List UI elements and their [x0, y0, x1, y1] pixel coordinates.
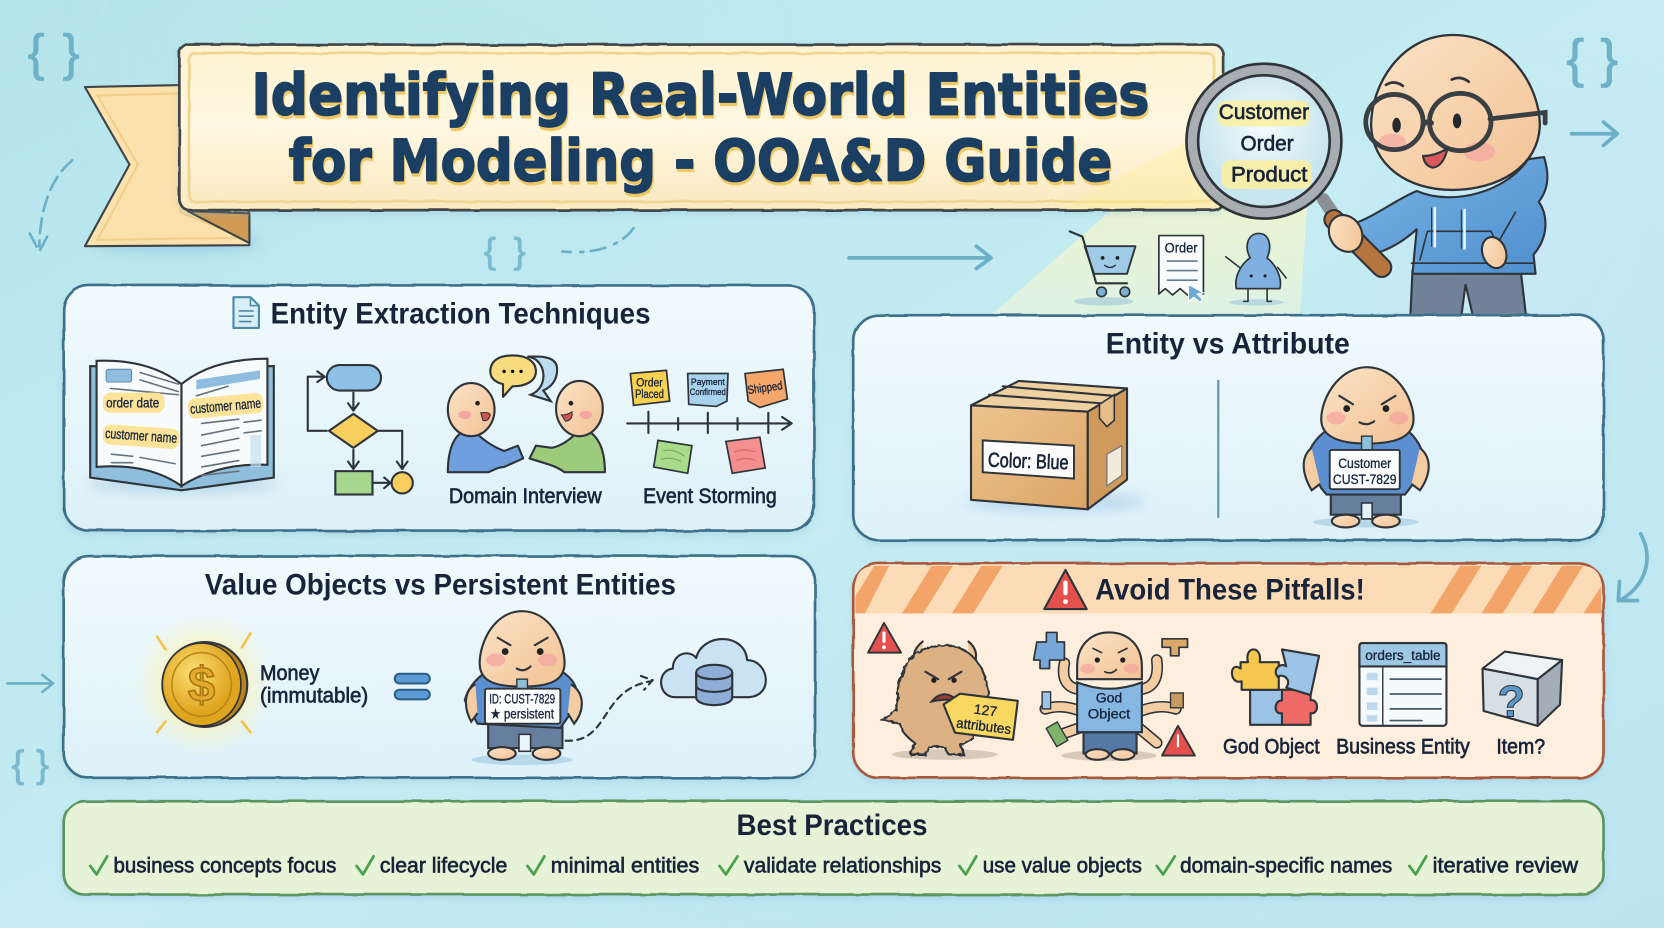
equals sign: [395, 674, 430, 699]
person left: [448, 429, 523, 472]
event storming illustration: Placed: [635, 388, 664, 401]
dashed arrow to database: [566, 676, 653, 741]
panel frame: [64, 801, 1604, 895]
decorative brace lower left: { }: [12, 743, 49, 786]
magnifier lens: [1186, 64, 1341, 219]
label: god object: God Object: [1223, 735, 1320, 758]
coin label: Money: [260, 662, 320, 685]
icon: warning triangle: [1044, 570, 1087, 609]
flowchart: [308, 365, 413, 495]
box label: [983, 440, 1074, 479]
character with customer badge: Customer: [1338, 456, 1392, 471]
magnifier words: Customer: [1219, 101, 1309, 124]
timeline: [627, 412, 792, 433]
event storming illustration: Payment: [691, 377, 725, 388]
caption: Domain Interview: [449, 485, 602, 508]
event storming illustration: Shipped: [747, 379, 783, 397]
decorative brace top right: { }: [1566, 29, 1618, 88]
heading: Avoid These Pitfalls!: [1095, 574, 1365, 607]
mascot gripping hand: [1322, 209, 1369, 258]
capsule head and shirt: [1077, 632, 1142, 679]
panel: entity vs attribute: [853, 315, 1604, 540]
highlighted words: [103, 393, 164, 413]
warning triangle: [1162, 726, 1195, 756]
arms: [1045, 660, 1176, 743]
panel frame: [64, 285, 814, 531]
panel frame: [64, 556, 815, 778]
attributes tag: 127: [973, 702, 998, 719]
book with highlighted nouns: order date: [106, 395, 159, 410]
speech bubbles: [527, 357, 557, 401]
icon: order receipt: Order: [1165, 241, 1198, 256]
icon: order receipt: [1159, 236, 1203, 302]
checklist: business concepts focus: [114, 854, 336, 877]
heading: Entity vs Attribute: [1106, 327, 1350, 360]
title text: for Modeling - OOA&D Guide: [289, 127, 1112, 194]
mascot glasses: [1366, 93, 1545, 151]
icon: orders table: orders_table: [1365, 648, 1441, 663]
icon: blue person: [1226, 233, 1286, 306]
checklist: iterative review: [1433, 854, 1579, 877]
title text: [252, 62, 1149, 194]
character with customer badge: CUST-7829: [1333, 472, 1397, 487]
magnifier neck and handle: [1323, 200, 1335, 216]
label: business entity: Business Entity: [1336, 735, 1470, 758]
magnifying glass: Order: [1241, 133, 1294, 156]
icon: shopping cart: [1070, 231, 1136, 306]
arrow: left edge: [7, 675, 53, 692]
title banner: [85, 45, 1224, 253]
mascot with magnifying glass: [1186, 35, 1547, 316]
attributes tag: [940, 692, 1018, 740]
many-armed god object character: Object: [1088, 706, 1130, 721]
decorative brace under banner: { }: [484, 230, 526, 271]
heading: Best Practices: [736, 809, 928, 842]
coin label: (immutable): [260, 685, 368, 707]
many-armed god object character: [1034, 632, 1195, 761]
light beam: [992, 138, 1307, 314]
icon: mystery question box: ?: [1498, 677, 1525, 726]
icon: mystery question box: [1483, 652, 1562, 726]
decorative brace top left: { }: [28, 24, 80, 81]
checklist: domain-specific names: [1180, 854, 1392, 877]
panel: best practices: [64, 801, 1604, 895]
ID badge: [485, 689, 560, 724]
mascot hand on hip: [1478, 234, 1511, 272]
checklist: [90, 854, 1579, 877]
banner body: [179, 45, 1224, 210]
shirt label: God: [1096, 690, 1122, 705]
character with customer badge: [1304, 367, 1429, 527]
arrow: curved right: [1618, 534, 1647, 601]
mascot cheeks: [1379, 134, 1495, 161]
arrow: dashed left: [30, 160, 72, 251]
attributes tag: attributes: [955, 715, 1012, 737]
monster with 127 attributes tag: [881, 641, 1018, 760]
mascot head: [1371, 35, 1540, 190]
panel: avoid these pitfalls: [853, 563, 1604, 778]
icon: orders table: [1359, 643, 1446, 726]
icon: glowing gold coin: $: [188, 658, 215, 712]
event storming illustration: Order: [636, 376, 663, 389]
icon: cardboard box attribute: Color: Blue: [988, 450, 1069, 474]
book with highlighted nouns: [87, 359, 278, 492]
character with persistent ID badge: [465, 611, 582, 765]
icon: cardboard box attribute: [966, 381, 1146, 511]
mascot hoodie: [1350, 157, 1547, 274]
sticky notes bottom: [654, 440, 692, 473]
hazard stripe header: [855, 566, 1601, 613]
mascot face: [1386, 78, 1469, 168]
arrow: top right: [1572, 122, 1617, 145]
heading: Value Objects vs Persistent Entities: [205, 568, 676, 601]
person right: [530, 428, 605, 472]
magnifying glass: [1186, 64, 1382, 267]
label: item: Item?: [1496, 735, 1545, 758]
magnifying glass: Product: [1231, 163, 1308, 186]
panel frame: [853, 315, 1604, 540]
book with highlighted nouns: customer name: [105, 426, 178, 446]
heading: Entity Extraction Techniques: [271, 298, 651, 331]
book with highlighted nouns: customer name: [190, 396, 262, 417]
panel frame: [853, 563, 1604, 778]
domain interview illustration: [448, 355, 605, 508]
sticky notes top: [630, 370, 670, 405]
icon: cloud database: [661, 639, 766, 705]
event storming illustration: [627, 369, 792, 508]
character with persistent ID badge: ID: CUST-7829: [489, 692, 555, 707]
icon: puzzle pieces: [1232, 649, 1319, 725]
divider: [1217, 380, 1219, 518]
mascot pants: [1410, 271, 1526, 316]
customer badge: [1330, 450, 1400, 489]
panel: entity extraction techniques: [64, 285, 814, 531]
coin label: [260, 662, 368, 707]
checklist: use value objects: [983, 854, 1142, 877]
held items: [1034, 632, 1064, 669]
checklist: minimal entities: [551, 854, 699, 877]
checklist: clear lifecycle: [380, 854, 507, 877]
arrow: dashed under banner: [562, 228, 634, 252]
banner ribbon tail: [85, 85, 260, 253]
event storming illustration: Confirmed: [690, 387, 726, 398]
icon: small warning triangle: [868, 623, 901, 653]
icon: glowing gold coin: [132, 612, 276, 757]
icon: document: [233, 297, 259, 328]
caption: Event Storming: [643, 485, 777, 508]
arrow: centre: [849, 246, 991, 268]
panel: value objects vs persistent entities: [64, 556, 815, 778]
checklist: validate relationships: [744, 854, 941, 877]
title text: Identifying Real-World Entities: [252, 62, 1149, 129]
character with persistent ID badge: ★ persistent: [490, 706, 554, 721]
